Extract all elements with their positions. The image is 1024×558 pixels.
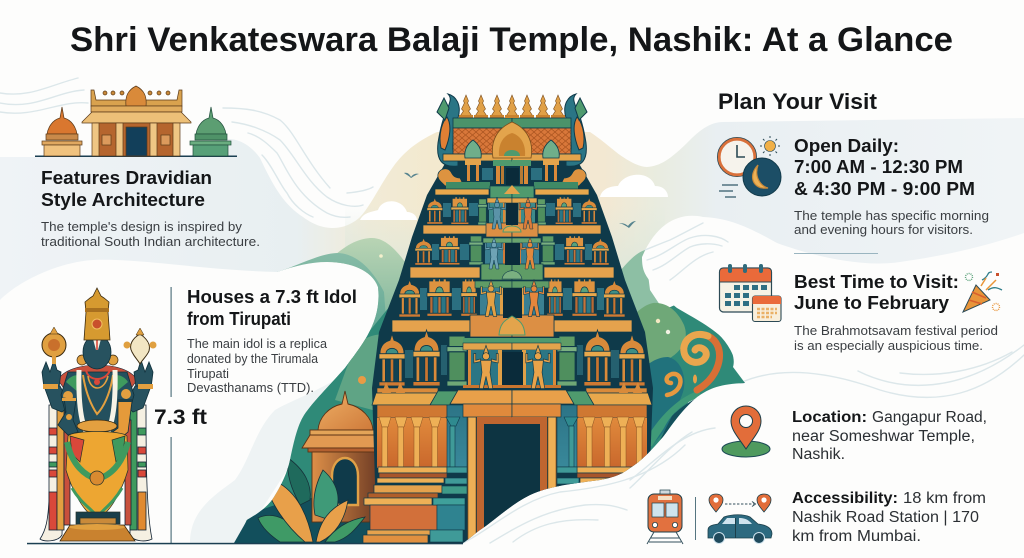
icon: Venkateswara idol: [40, 288, 156, 541]
left small shrine: [42, 107, 82, 156]
heading: June to February: [794, 293, 949, 313]
temple: left half: [363, 94, 512, 547]
wall: [377, 405, 447, 418]
deity figures: [488, 197, 506, 229]
lower bar: [377, 388, 438, 393]
teal pillar: [430, 405, 467, 542]
ground line: [35, 156, 237, 157]
tilak: [93, 339, 101, 350]
steps: [363, 467, 447, 543]
body: The temple's design is inspired by: [41, 220, 243, 234]
sashes: [40, 405, 152, 541]
right teal field: [628, 306, 745, 470]
text block: accessibility: Nashik Road Station | 170: [792, 509, 979, 526]
text block: best time: [794, 272, 998, 353]
heading: Open Daily:: [794, 136, 899, 156]
chest jewellery: [63, 375, 131, 401]
tier 5: [379, 334, 405, 386]
small calendar: [752, 296, 781, 322]
body: [187, 337, 327, 395]
heading: from Tirupati: [187, 309, 291, 329]
body: is an especially auspicious time.: [794, 339, 983, 353]
torso: [61, 372, 134, 440]
garland behind shoulders: [58, 365, 137, 390]
cloud left: [360, 201, 417, 220]
left teal hill tail: [277, 253, 386, 413]
heading: [794, 136, 975, 199]
text block: location: Location:: [792, 409, 867, 426]
temple: central dark core: [372, 160, 653, 545]
tier 4: [399, 280, 420, 317]
heading: Style Architecture: [41, 190, 205, 210]
cloud right: [600, 175, 668, 197]
body: [794, 209, 989, 237]
left light hill: [301, 238, 404, 420]
small shrine: [302, 391, 380, 522]
body: and evening hours for visitors.: [794, 223, 973, 237]
lion: [438, 169, 462, 186]
right sage hill: [637, 302, 686, 364]
panel: pale backdrop across page: [0, 118, 1024, 310]
orange swirl small: [667, 374, 680, 395]
icon: train: [647, 490, 683, 544]
icon: mini temple: [35, 86, 237, 157]
body: Tirupati: [187, 367, 229, 381]
body: [41, 220, 260, 249]
text block: idol: [187, 287, 357, 395]
leaves: [258, 458, 365, 542]
heading: [41, 168, 212, 210]
text block: accessibility: km from Mumbai.: [792, 528, 921, 545]
icon: clock and moon: [717, 136, 781, 197]
panel: idol white blob: [0, 260, 379, 325]
small green dome: [465, 140, 481, 158]
temple: [363, 94, 661, 549]
heading: Features Dravidian: [41, 168, 212, 188]
text block: dravidian architecture: [41, 168, 260, 249]
body: The main idol is a replica: [187, 337, 327, 351]
bird right: [619, 221, 636, 228]
temple: right half mirrored: [512, 93, 652, 491]
panel: right lower white blob: [642, 216, 1024, 330]
white garland: [79, 370, 115, 447]
face: [83, 335, 111, 369]
panel: lower backdrop tint behind temple: [345, 205, 665, 305]
text block: accessibility: 18 km from: [903, 490, 986, 507]
necklaces: [79, 370, 115, 447]
text block: location: Nashik.: [792, 446, 845, 463]
left teal foliage: [244, 308, 388, 524]
central mandapa: [82, 86, 191, 156]
dhoti: [66, 432, 128, 524]
earrings: [77, 355, 87, 365]
panel: idol corner tint: [190, 372, 347, 543]
text block: open daily: [794, 136, 989, 237]
icon: calendar: [720, 264, 781, 322]
right blue teal blob: [628, 357, 684, 470]
dark leaf: [660, 382, 748, 440]
scene: landscape backdrop: [230, 94, 748, 558]
right light hill: [622, 250, 659, 312]
icon: location pin: [722, 406, 770, 457]
icon: party popper: [963, 272, 1002, 312]
heading: [794, 272, 959, 313]
crown: [84, 288, 110, 340]
text block: accessibility: Accessibility:: [792, 490, 898, 507]
dots: [358, 376, 366, 384]
heading: plan your visit: Plan Your Visit: [718, 89, 878, 114]
tier doors: [506, 203, 518, 225]
waist belt: [77, 420, 117, 432]
right small shrine: [190, 107, 231, 156]
height label: 7.3 ft: [154, 406, 207, 429]
icon: route pins and car: [708, 494, 772, 544]
heading: Best Time to Visit:: [794, 272, 959, 292]
heading: [187, 287, 357, 329]
chakra: [42, 327, 66, 364]
body: traditional South Indian architecture.: [41, 235, 260, 249]
orange swirl large: [667, 334, 720, 395]
base: [60, 525, 135, 541]
heading: & 4:30 PM - 9:00 PM: [794, 179, 975, 199]
body: [794, 324, 998, 353]
conch: [124, 328, 156, 364]
body: The temple has specific morning: [794, 209, 989, 223]
temple: center top: [474, 95, 550, 549]
dark foliage left: [234, 498, 370, 543]
body: donated by the Tirumala: [187, 352, 318, 366]
door pillars: [468, 417, 476, 547]
text block: location: near Someshwar Temple,: [792, 428, 975, 445]
arms and hands: [42, 360, 153, 412]
title: Shri Venkateswara Balaji Temple, Nashik: At a Glance: [70, 21, 953, 59]
text block: location: Gangapur Road,: [872, 409, 987, 426]
tier 2: [427, 198, 443, 224]
left lowered arm: [58, 398, 78, 435]
tier 3: [415, 238, 432, 265]
horn: [437, 94, 459, 166]
heading: Houses a 7.3 ft Idol: [187, 287, 357, 307]
text block: location: [792, 409, 987, 463]
body: Devasthanams (TTD).: [187, 381, 314, 395]
bird left: [404, 173, 419, 178]
text block: accessibility: [792, 490, 986, 545]
heading: 7:00 AM - 12:30 PM: [794, 157, 963, 177]
right gold arm: [104, 401, 132, 445]
body: The Brahmotsavam festival period: [794, 324, 998, 338]
